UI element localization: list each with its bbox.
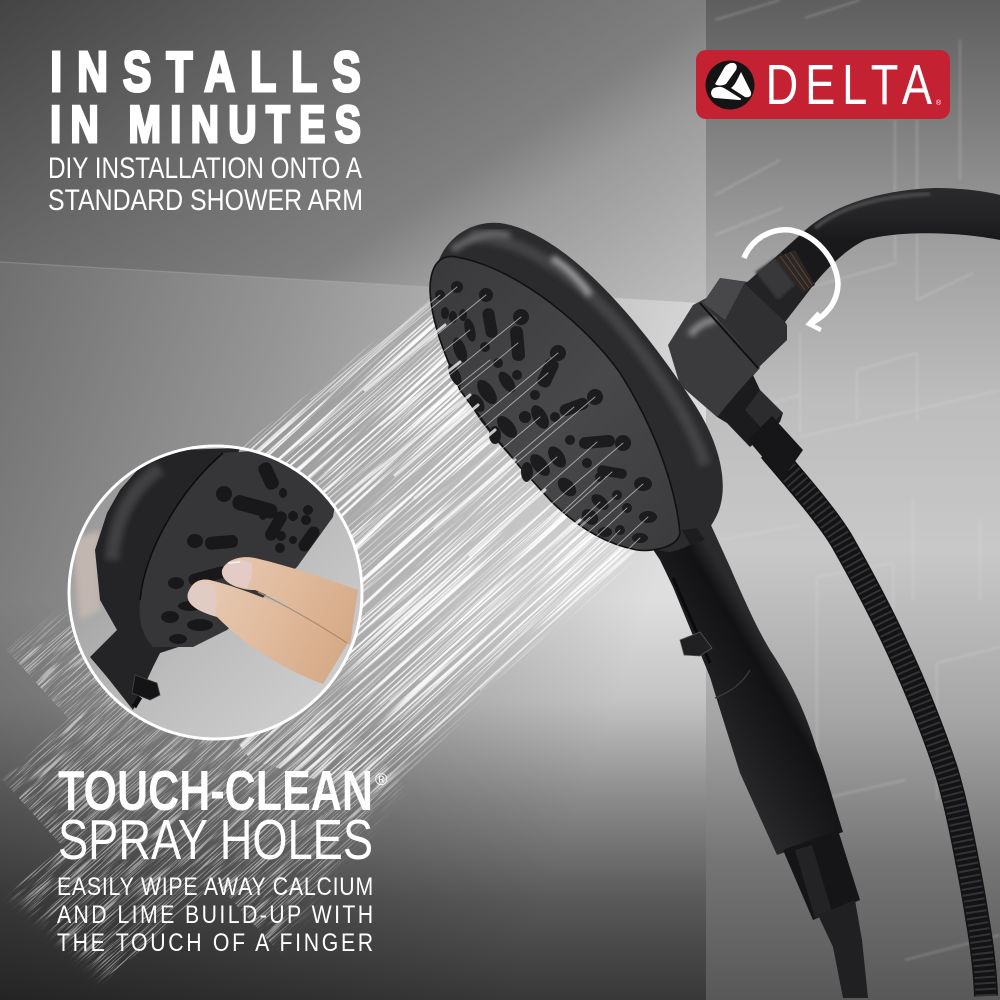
water spray: long streaks bbox=[236, 300, 636, 798]
inset spray holes bbox=[161, 460, 322, 644]
background: shower wall bbox=[0, 0, 707, 1000]
logo mark bbox=[706, 60, 754, 110]
text: DIY installation bbox=[48, 152, 363, 217]
inset head face bbox=[140, 445, 345, 647]
head face bbox=[430, 257, 680, 550]
Delta logo: ® bbox=[936, 99, 942, 107]
inset handle button bbox=[132, 675, 160, 700]
logo wordmark: DELTA bbox=[766, 53, 933, 116]
text: DIY installation: DIY INSTALLATION ONTO A bbox=[48, 152, 362, 185]
heading: touch-clean spray holes: SPRAY HOLES bbox=[58, 808, 373, 872]
shower head body bbox=[430, 223, 723, 552]
heading: touch-clean spray holes bbox=[58, 759, 388, 872]
mount: swivel connector bbox=[668, 250, 815, 480]
inset head body bbox=[90, 448, 240, 710]
inset circle: touch-clean close-up bbox=[68, 444, 364, 740]
lower finger bbox=[188, 580, 348, 684]
water streaks leaving head bbox=[240, 287, 648, 740]
heading: touch-clean spray holes: ® bbox=[375, 770, 388, 789]
text: touch-clean description: AND LIME BUILD-UP WITH bbox=[57, 900, 373, 928]
spray holes bbox=[435, 281, 657, 543]
rotation arrow bbox=[744, 230, 838, 330]
Delta logo bbox=[696, 50, 950, 119]
heading: installs in minutes: INSTALLS bbox=[50, 39, 361, 103]
shower arm bbox=[780, 188, 1000, 287]
upper finger bbox=[222, 557, 358, 645]
text: DIY installation: STANDARD SHOWER ARM bbox=[48, 184, 363, 217]
hose bbox=[770, 450, 986, 996]
water spray: fine lower-left mist bbox=[2, 608, 404, 985]
text: touch-clean description: THE TOUCH OF A FINGER bbox=[57, 928, 373, 956]
handle button bbox=[680, 632, 712, 656]
heading: installs in minutes: IN MINUTES bbox=[50, 94, 361, 153]
handle bbox=[650, 523, 843, 855]
heading: installs in minutes bbox=[50, 39, 361, 153]
handle collar bbox=[783, 830, 868, 998]
text: touch-clean description bbox=[57, 872, 373, 956]
heading: touch-clean spray holes: TOUCH-CLEAN bbox=[58, 759, 373, 823]
text: touch-clean description: EASILY WIPE AWAY CALCIUM bbox=[57, 872, 373, 900]
background: tiled wall bbox=[706, 0, 1000, 1000]
